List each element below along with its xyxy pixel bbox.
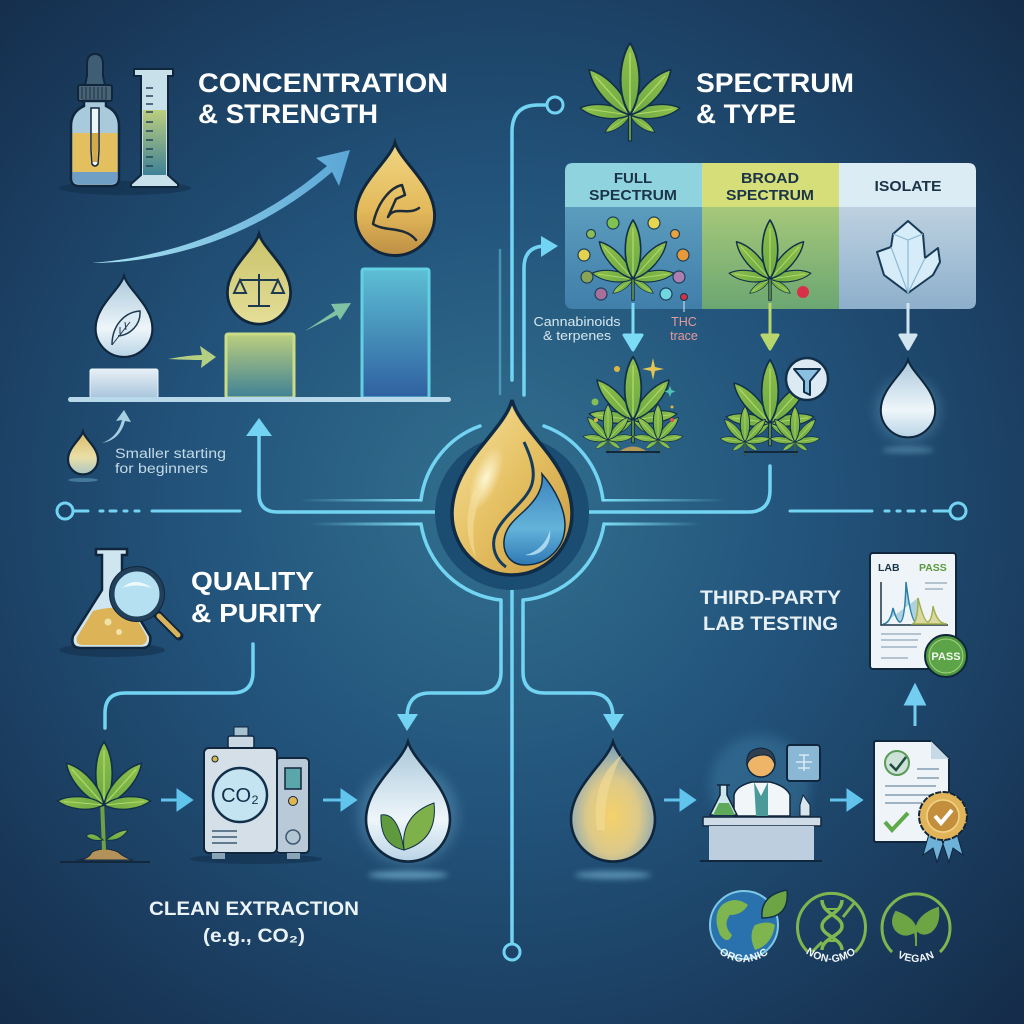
badge: organic: ORGANIC (720, 948, 768, 962)
left dashed timeline (74, 510, 240, 512)
icon: full plant (583, 357, 683, 453)
arrow full (624, 303, 642, 350)
panel: third-party lab testing (570, 552, 968, 962)
swirl line (494, 442, 533, 567)
heading (696, 68, 854, 129)
icon: leaf (579, 43, 681, 141)
icon: scientist at desk (700, 735, 822, 861)
icon: feather drop (96, 276, 152, 357)
heading: & TYPE (696, 99, 796, 129)
bar low (90, 369, 158, 398)
icon: measuring cylinder (131, 69, 178, 187)
node bottom (504, 944, 520, 960)
heading (198, 68, 448, 129)
upper right arc (544, 426, 603, 500)
badge: non-GMO (796, 892, 867, 962)
column: full spectrum (565, 163, 702, 312)
icon: certificate (874, 741, 967, 862)
badge: vegan (880, 892, 952, 962)
bar chart (68, 269, 451, 402)
arrowhead to chart (246, 418, 272, 436)
top vertical line to node (512, 105, 547, 380)
dark halo (435, 436, 589, 590)
heading: SPECTRUM (696, 68, 854, 98)
lower right fade line (604, 522, 700, 526)
clean extraction caption: (e.g., CO₂) (203, 926, 305, 947)
panel: spectrum and type (534, 43, 976, 455)
THC note: THC (671, 315, 697, 329)
icon: CO2 extraction machine: CO₂ (221, 785, 259, 807)
central drop emblem (435, 400, 589, 590)
arrowhead gold drop (603, 714, 624, 731)
heading: CONCENTRATION (198, 68, 448, 98)
icon: lab report: LAB (878, 562, 900, 574)
right dashed timeline (790, 510, 949, 512)
step arrow (305, 303, 351, 331)
arrow up (906, 686, 924, 726)
spectrum table (565, 163, 976, 312)
heading: & STRENGTH (198, 99, 378, 129)
heading: LAB TESTING (703, 614, 838, 635)
THC note: trace (670, 329, 698, 343)
step arrow (168, 346, 216, 368)
blue drop swirl (504, 474, 565, 565)
clean extraction caption: CLEAN EXTRACTION (149, 899, 359, 920)
connector lines (74, 105, 949, 944)
upper right fade line (603, 499, 725, 502)
beginners note: Smaller starting (115, 446, 226, 461)
icon: dropper bottle (59, 54, 191, 195)
icon: lab report: PASS (919, 562, 947, 574)
icon: gold blue drop (571, 742, 655, 879)
arrowhead clear drop (397, 714, 418, 731)
arrow (664, 791, 694, 809)
lower right branch to gold drop (523, 524, 613, 718)
bar high (362, 269, 429, 398)
icon: clear drop with leaf (358, 742, 458, 879)
icon: seedling (57, 742, 151, 862)
node right (950, 503, 966, 519)
trend arrow (92, 150, 350, 263)
arrow (323, 791, 355, 809)
arrow broad (762, 303, 778, 349)
column: isolate: ISOLATE (874, 178, 942, 195)
arrow (161, 791, 191, 809)
icon: CO2 extraction machine (190, 727, 322, 864)
column: broad spectrum: SPECTRUM (726, 187, 814, 204)
icon: lab report (870, 553, 967, 677)
centre vertical line to bottom node (510, 589, 514, 944)
quality to clean extraction line (105, 644, 253, 728)
column: isolate (839, 163, 976, 309)
blue highlight (525, 530, 550, 555)
upper left fade line (300, 499, 421, 502)
arrowhead to table (541, 236, 558, 257)
icon: small drop (68, 432, 98, 482)
column: full spectrum: FULL (614, 170, 652, 187)
heading (700, 588, 841, 635)
arrow isolate (900, 303, 916, 349)
icon: lab report: PASS (931, 651, 961, 663)
lower left branch to clear drop (407, 524, 501, 718)
heading: THIRD-PARTY (700, 588, 841, 609)
heading: & PURITY (191, 598, 322, 628)
heading (191, 566, 322, 628)
panel: quality and purity (57, 549, 458, 947)
icon: muscle drop (355, 143, 435, 255)
upper left arc (421, 426, 480, 500)
cannabinoids note: & terpenes (543, 329, 611, 343)
connector to concentration chart (259, 432, 434, 512)
icon: flask and magnifier (59, 549, 179, 657)
panel: concentration and strength (59, 54, 451, 482)
cannabinoids note: Cannabinoids (534, 315, 620, 329)
badge: non-GMO: NON-GMO (806, 947, 854, 962)
gold lower sheen (467, 490, 484, 558)
column: broad spectrum: BROAD (741, 170, 799, 187)
connector nodes and arrowheads (57, 97, 966, 960)
icon: scale drop (227, 234, 291, 324)
cannabinoids note (534, 315, 620, 343)
column: full spectrum: SPECTRUM (589, 187, 677, 204)
line to spectrum table (524, 246, 552, 395)
icon: isolate drop (876, 360, 940, 453)
beginners note: for beginners (115, 461, 208, 476)
baseline (68, 397, 451, 402)
curved arrow (102, 410, 131, 443)
column: broad spectrum (702, 163, 839, 309)
lower left fade line (310, 522, 421, 526)
THC note (670, 315, 698, 343)
gold highlight (461, 442, 511, 514)
heading: QUALITY (191, 566, 314, 596)
node left (57, 503, 73, 519)
clean extraction caption (149, 899, 359, 947)
connector to broad spectrum (590, 466, 770, 512)
badge: vegan: VEGAN (900, 950, 934, 962)
bar medium (226, 334, 294, 398)
node top (547, 97, 563, 113)
beginners note (115, 446, 226, 476)
faint vertical line (499, 250, 501, 394)
arrow (830, 791, 861, 809)
gold drop (452, 400, 572, 575)
icon: filtered plant (720, 358, 828, 455)
badge: organic (709, 889, 788, 962)
